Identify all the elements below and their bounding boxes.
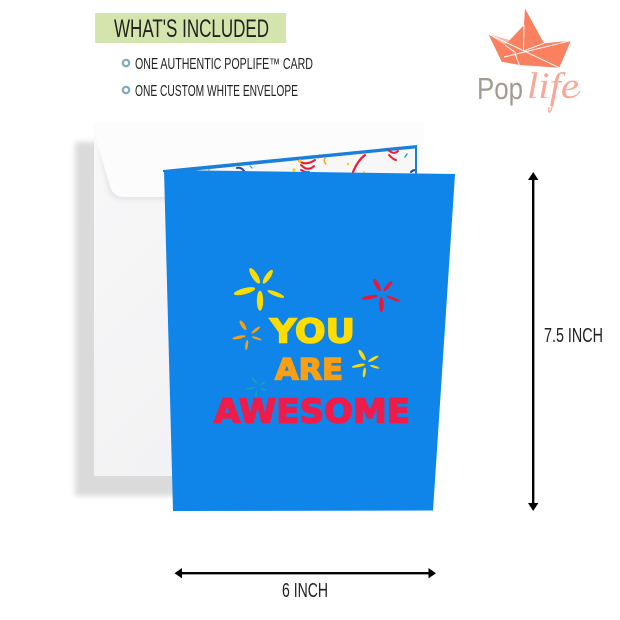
flower: small yellow <box>352 349 380 378</box>
logo: Poplife <box>477 8 580 112</box>
flower: red <box>361 278 401 312</box>
label: 6 inch: 6 INCH <box>282 580 328 602</box>
envelope flap <box>94 122 424 197</box>
envelope body <box>94 122 424 476</box>
flower: orange <box>232 320 262 350</box>
card inside panel <box>163 145 417 176</box>
icon: origami boat <box>488 8 571 68</box>
logo: Poplife: life <box>527 66 579 107</box>
flower: large yellow <box>233 267 285 311</box>
card title: you: YOU <box>269 312 355 350</box>
logo swash <box>549 91 580 112</box>
item: authentic card <box>123 56 313 73</box>
flower: teal <box>246 377 267 398</box>
card front <box>164 170 455 511</box>
envelope flap shadow <box>100 150 200 200</box>
confetti <box>208 150 416 173</box>
envelope shadow <box>75 142 195 496</box>
arrow: width <box>174 568 436 578</box>
item: white envelope: ONE CUSTOM WHITE ENVELOPE <box>135 83 298 100</box>
envelope <box>75 122 424 496</box>
logo wordmark: Pop <box>477 71 523 106</box>
item: white envelope <box>123 83 298 100</box>
card title: are: ARE <box>275 352 343 386</box>
arrow: height <box>528 172 538 511</box>
card title: awesome: AWESOME <box>214 392 410 430</box>
list: included items <box>123 56 313 100</box>
item: authentic card: ONE AUTHENTIC POPLIFE™ CARD <box>135 56 313 73</box>
heading: what's included <box>95 13 286 43</box>
heading: what's included: WHAT'S INCLUDED <box>114 15 269 43</box>
